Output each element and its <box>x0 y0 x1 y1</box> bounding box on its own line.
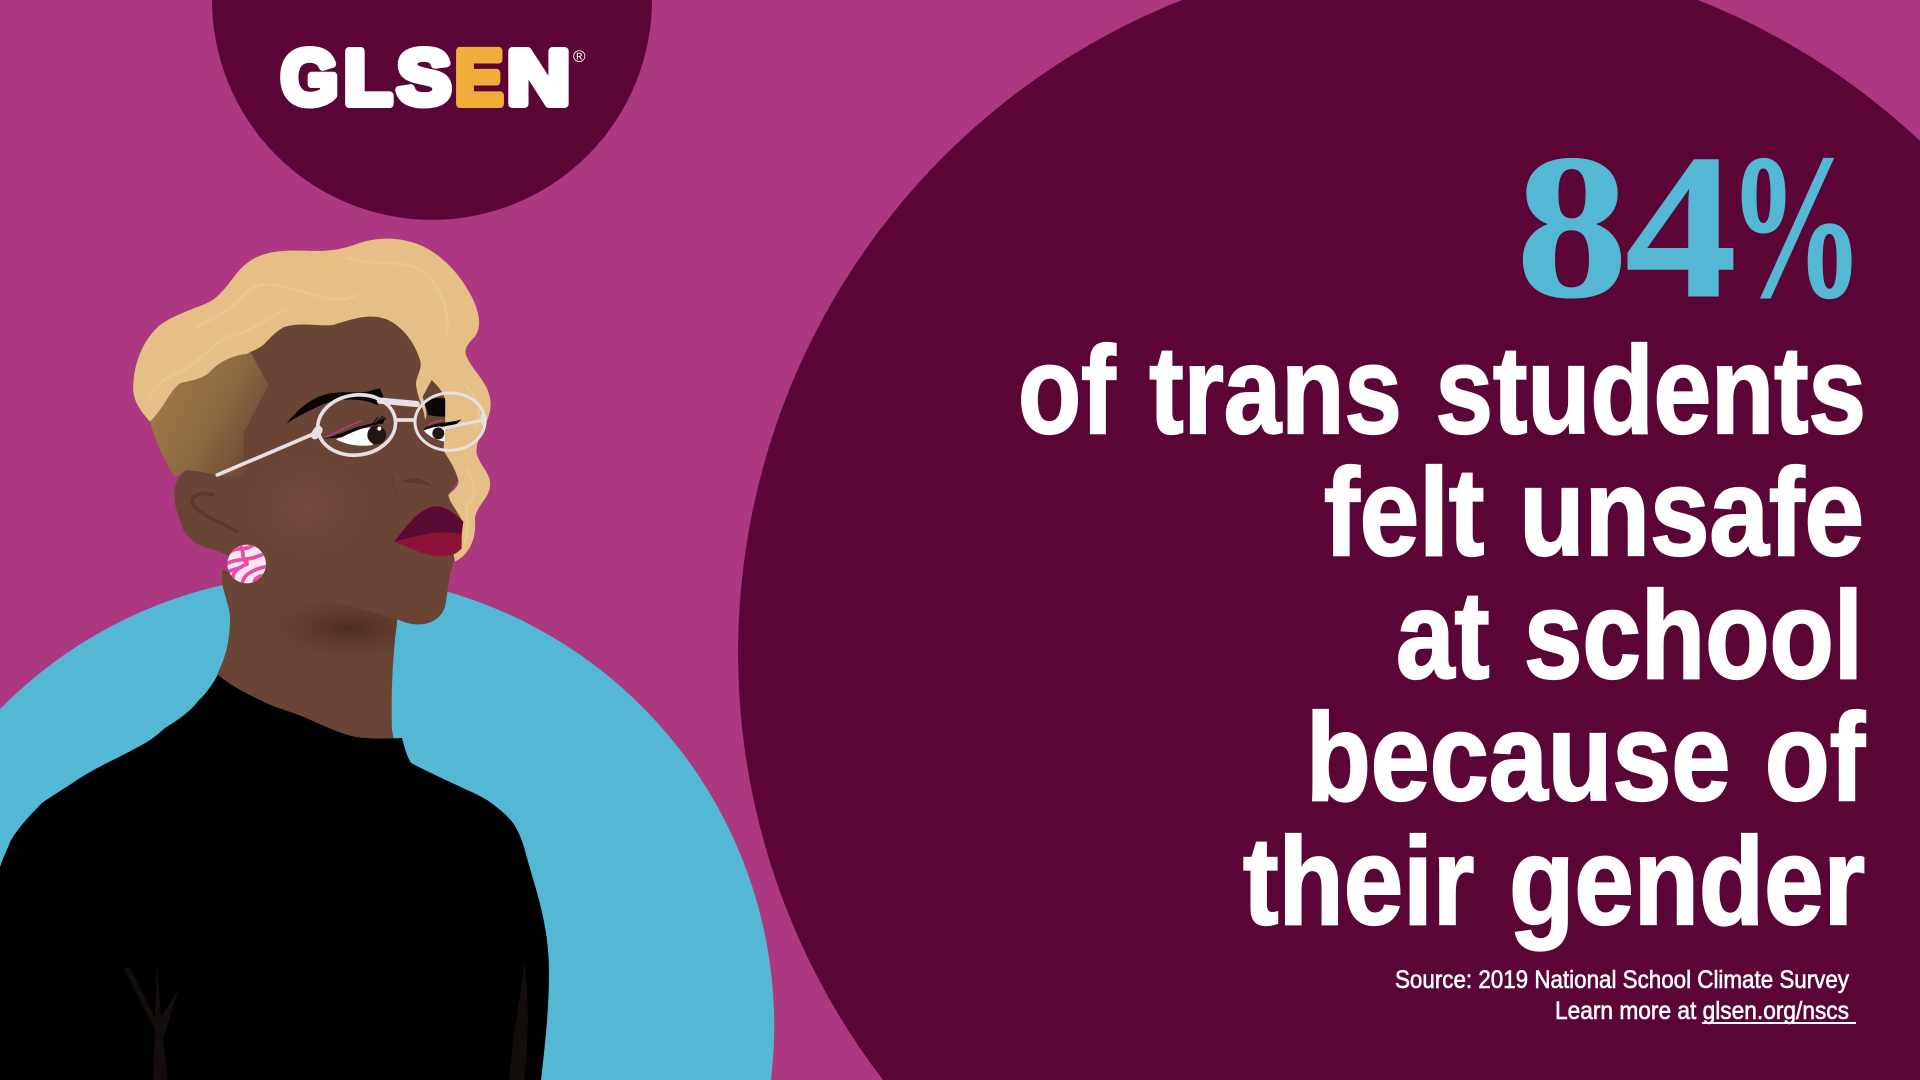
hair <box>133 239 491 562</box>
lips <box>394 506 463 556</box>
right eyebrow <box>424 398 445 417</box>
head <box>133 239 491 625</box>
glasses <box>217 390 486 475</box>
neck <box>215 570 397 739</box>
logo: GLSEN <box>281 35 586 121</box>
logo: GLSEN: ® <box>573 47 586 66</box>
earring <box>227 544 266 584</box>
shirt fold left <box>124 963 178 1080</box>
blue circle behind figure <box>0 574 774 1080</box>
black turtleneck top <box>0 675 549 1080</box>
logo: GLSEN: E <box>455 35 503 121</box>
logo: GLSEN: G <box>281 35 338 121</box>
headline text <box>1018 322 1866 951</box>
left eye <box>324 416 386 446</box>
face <box>174 303 463 625</box>
ear detail <box>192 494 237 532</box>
shirt fold right <box>509 960 528 1080</box>
logo circle <box>212 0 652 220</box>
nose detail <box>393 475 433 494</box>
logo: GLSEN: L <box>344 35 392 121</box>
statistic: 84%: 8 <box>1516 112 1628 341</box>
source text: Source: 2019 National School Climate Survey <box>1395 966 1849 994</box>
hair highlights <box>150 258 479 547</box>
shaved side of head <box>150 345 268 477</box>
illustration: person <box>0 239 549 1080</box>
statistic: 84%: 4 <box>1625 112 1737 341</box>
logo: GLSEN: N <box>507 35 570 121</box>
right eye <box>423 419 462 442</box>
big dark circle panel <box>738 0 1920 1080</box>
cheek tone <box>243 453 370 560</box>
source text <box>1395 966 1856 1025</box>
source text: Learn more at glsen.org/nscs <box>1555 997 1849 1025</box>
logo: GLSEN: S <box>397 35 451 121</box>
left eyebrow <box>287 388 383 423</box>
